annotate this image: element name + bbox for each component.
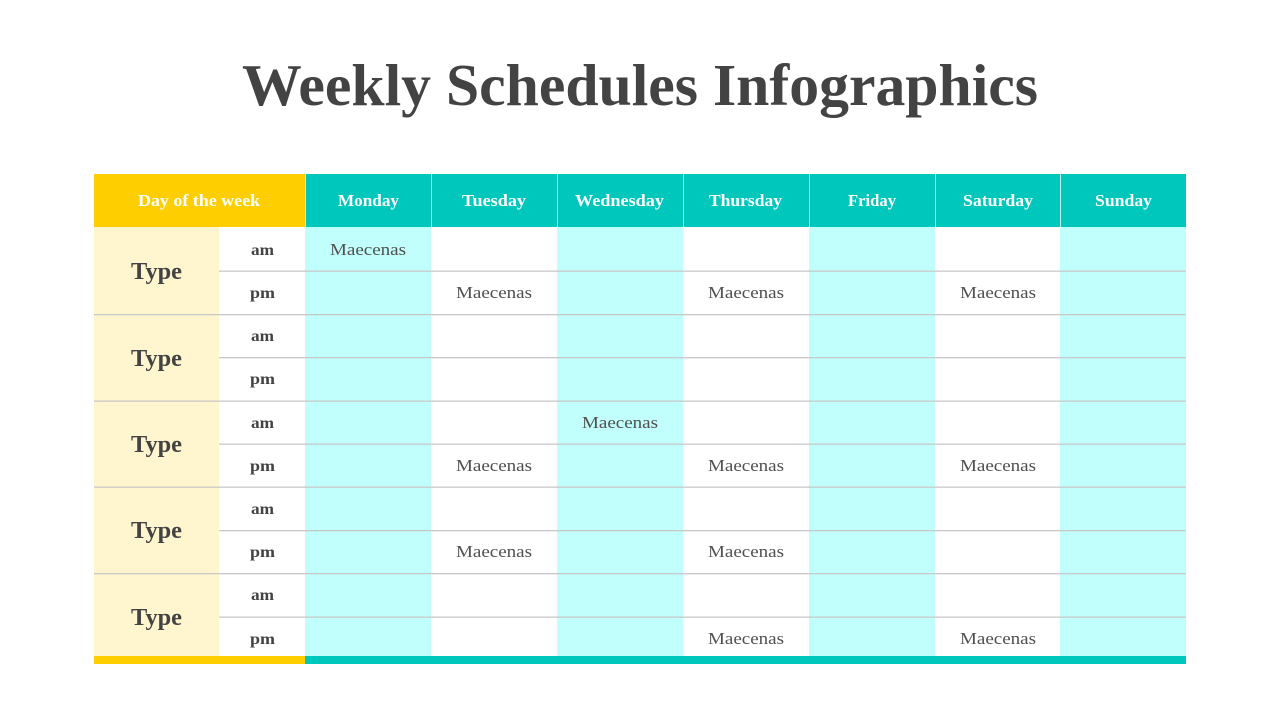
header row: Thursday xyxy=(709,191,783,210)
row group 3: Maecenas xyxy=(960,456,1036,475)
row group 1: Maecenas xyxy=(330,240,406,259)
row group 5: am xyxy=(251,587,275,604)
schedule table xyxy=(94,174,1186,664)
row group 3: am xyxy=(251,415,275,432)
row group 3: Maecenas xyxy=(582,413,658,432)
row group 5 xyxy=(131,587,1036,648)
row group 2: Type xyxy=(131,346,182,372)
header row: Friday xyxy=(848,191,896,210)
row group 2: pm xyxy=(250,371,276,388)
row group 4: pm xyxy=(250,544,276,561)
header row: Sunday xyxy=(1095,191,1153,210)
header row: Wednesday xyxy=(575,191,665,210)
row group 5: Maecenas xyxy=(708,629,784,648)
row group 4: am xyxy=(251,501,275,518)
title: Weekly Schedules Infographics xyxy=(242,52,1038,118)
row group 3: Type xyxy=(131,432,182,458)
row group 5: Maecenas xyxy=(960,629,1036,648)
bottom bar xyxy=(94,656,1186,664)
row group 3: pm xyxy=(250,458,276,475)
row group 3: Maecenas xyxy=(456,456,532,475)
row group 2 xyxy=(131,328,276,388)
row group 2: am xyxy=(251,328,275,345)
header row: Monday xyxy=(338,191,399,210)
row group 3: Maecenas xyxy=(708,456,784,475)
header row xyxy=(94,174,1186,227)
row group 3 xyxy=(131,413,1036,475)
header row: Tuesday xyxy=(462,191,527,210)
panel: type column shading xyxy=(94,227,219,656)
header row: Day of the week xyxy=(138,191,261,210)
panel: weekday column shading xyxy=(305,227,1186,656)
header row: Saturday xyxy=(963,191,1034,210)
row group 1: Maecenas xyxy=(960,283,1036,302)
row group 4 xyxy=(131,501,784,561)
row group 1 xyxy=(131,240,1036,302)
row group 4: Maecenas xyxy=(708,542,784,561)
row group 1: pm xyxy=(250,285,276,302)
row group 1: Maecenas xyxy=(456,283,532,302)
row group 5: pm xyxy=(250,631,276,648)
row group 1: am xyxy=(251,242,275,259)
row group 4: Maecenas xyxy=(456,542,532,561)
row group 1: Type xyxy=(131,259,182,285)
row group 4: Type xyxy=(131,518,182,544)
row group 5: Type xyxy=(131,605,182,631)
row group 1: Maecenas xyxy=(708,283,784,302)
